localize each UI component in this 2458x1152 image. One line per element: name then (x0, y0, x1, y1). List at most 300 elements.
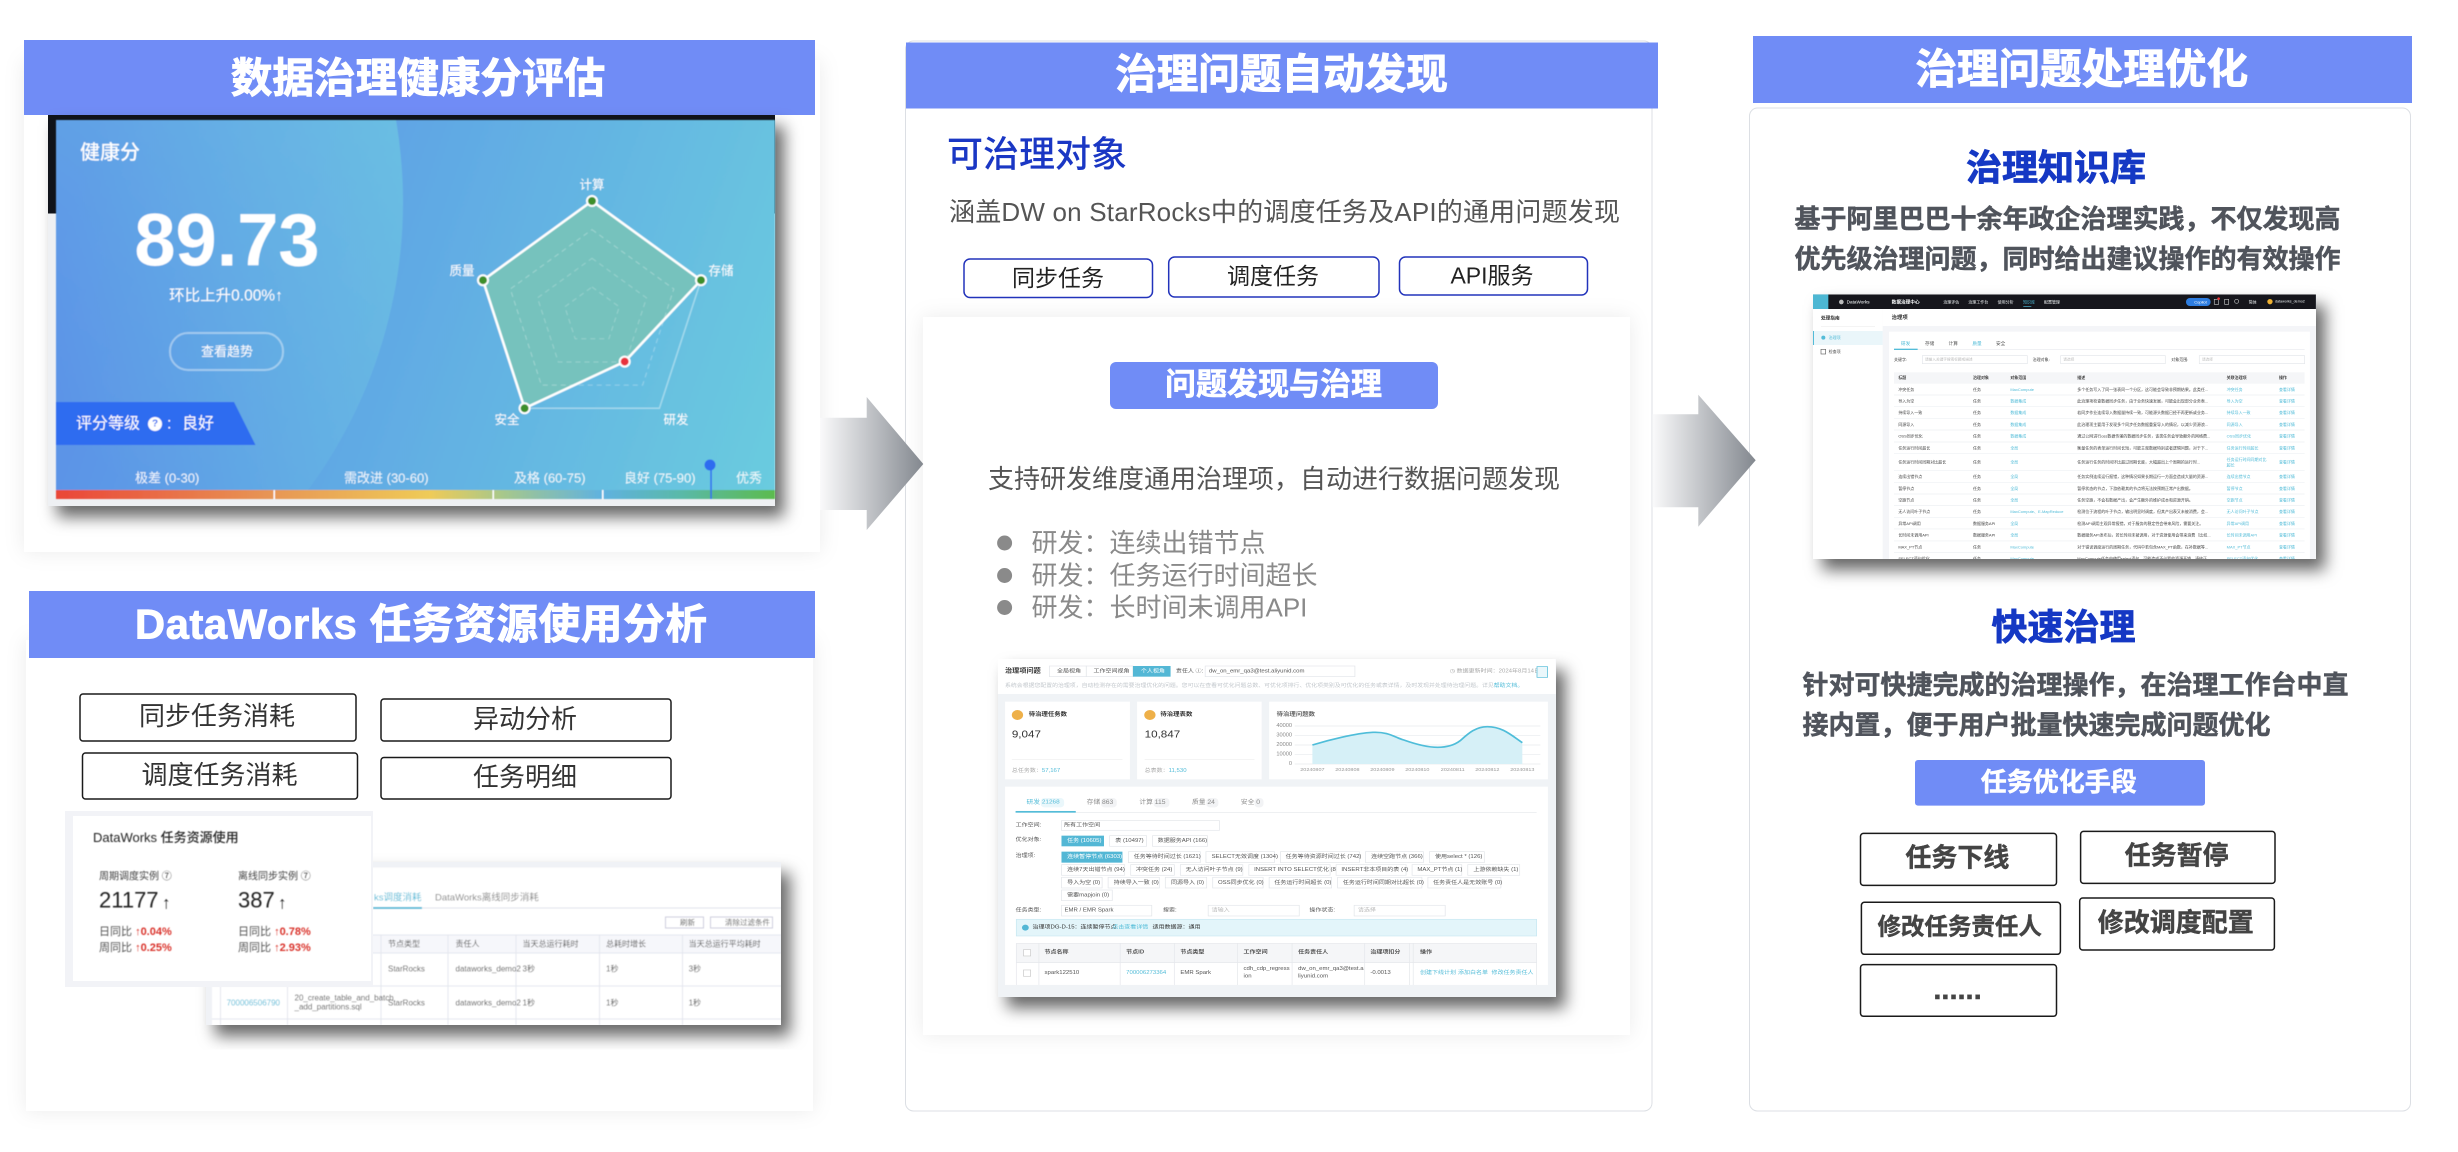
grade scale labels: 优秀 (736, 470, 762, 486)
issue list card (1005, 787, 1548, 985)
description: governable objects: 涵盖DW on StarRocks中的调度任务及API的通用问题发现 (949, 197, 1620, 227)
screenshot: consumption table: 1秒 (606, 998, 618, 1008)
screenshot: knowledge base table: 任务 (1973, 444, 1981, 450)
screenshot: knowledge base table: 若同步作业连续导入数据量持续一致，可能源头数据已经不再更新或业务... (2077, 409, 2208, 415)
screenshot: knowledge base table: 查看详情 (2279, 485, 2295, 491)
issue list card: 任务运行时间同期对比超长 (0) (1343, 878, 1424, 886)
tag: scheduled task consumption (82, 753, 358, 799)
issue list card: MAX_PT节点 (1) (1417, 866, 1463, 873)
pill: task optimization methods: 任务优化手段 (1981, 767, 2137, 797)
screenshot: knowledge base table: MAX_PT节点 (2227, 543, 2251, 549)
screenshot: knowledge base table: 查看详情 (2279, 386, 2295, 392)
screenshot: governance issue console: 全局视角 (1057, 667, 1081, 674)
screenshot: knowledge base table: 空跑节点 (1898, 496, 1914, 502)
stat card: tasks: 待治理任务数 (1029, 710, 1067, 718)
screenshot: knowledge base table: 任务 (1973, 432, 1981, 438)
screenshot: consumption table: 1秒 (606, 964, 618, 974)
button: more: ...... (1933, 974, 1982, 1006)
grade tag: 良好 (182, 414, 214, 432)
area chart: pending issues: 20000 (1276, 742, 1292, 748)
screenshot: knowledge base table: 数据集成 (2010, 397, 2026, 403)
screenshot: knowledge base table: 请选择 (2063, 357, 2075, 362)
bullet list: 研发：连续出错节点 (1032, 528, 1266, 558)
issue list card: 治理项: (1016, 852, 1036, 859)
screenshot: knowledge base table: MaxCompute、E-MapReduce (2010, 509, 2064, 514)
area chart: pending issues: 20240808 (1335, 767, 1360, 773)
screenshot: knowledge base table: 长时间未调用API (2227, 531, 2257, 537)
area chart: pending issues: 20240812 (1475, 767, 1500, 773)
stat card: tasks: 9,047 (1012, 729, 1041, 740)
metric: scheduled instances: 日同比 ↑0.04% (99, 925, 172, 938)
screenshot: knowledge base table: 任务 (1973, 386, 1981, 392)
screenshot: consumption table (206, 862, 781, 1026)
stat card: tables: 10,847 (1145, 729, 1180, 740)
issue list card: 持续导入一致 (0) (1114, 878, 1159, 886)
area chart: pending issues: 20240809 (1370, 767, 1395, 773)
issue list card: 连续暂停节点 (6303) (1067, 853, 1122, 860)
screenshot: knowledge base table: 数据集成 (2010, 409, 2026, 415)
screenshot: knowledge base table: 任务 (1973, 397, 1981, 403)
tag: API service: API服务 (1450, 262, 1534, 288)
tag: sync task: 同步任务 (1012, 265, 1104, 291)
issue list card: INSERT INTO SELECT优化 (8) (1254, 866, 1338, 873)
screenshot: knowledge base table: 空跑节点 (2227, 496, 2243, 502)
issue list card: 点击查看详情 (1112, 923, 1149, 930)
metric: scheduled instances: ↑ (162, 894, 170, 912)
screenshot: knowledge base table: 治理评估 (1943, 298, 1959, 304)
screenshot: governance issue console: 系统会根据您配置的治理项，自动检测存在的需要治理优化的问题。您可以在查看可优化问题总数、可优化项排行、优化项类别及可优化的任务或表详情，及时发现并处理待治理问题。详见帮助文档。 (1005, 681, 1523, 689)
screenshot: knowledge base table: 任务 (1973, 473, 1981, 479)
issue list card: 请输入 (1212, 906, 1230, 913)
screenshot: consumption table: 当天总运行耗时 (522, 938, 578, 948)
screenshot: knowledge base table: Copilot (2194, 299, 2208, 304)
screenshot: knowledge base table: 任务 (1973, 543, 1981, 549)
issue list card: 搜索: (1163, 906, 1177, 913)
screenshot: knowledge base table: 数据集成 (2010, 421, 2026, 427)
grade scale labels (135, 470, 762, 486)
issue list card: 任务等待时间过长 (1621) (1134, 853, 1201, 860)
screenshot: consumption table: 当天总运行平均耗时 (689, 938, 761, 948)
screenshot: knowledge base table: 查看详情 (2279, 458, 2295, 464)
button: take task offline (1860, 833, 2056, 885)
description: quick governance: 针对可快捷完成的治理操作，在治理工作台中直 (1802, 670, 2349, 700)
heading: issue handling optimization (1753, 36, 2412, 103)
screenshot: knowledge base table: 计算 (1949, 340, 1958, 347)
tag: task detail: 任务明细 (473, 762, 577, 792)
screenshot: consumption table: _add_partitions.sql (294, 1002, 362, 1012)
grade tag (56, 402, 256, 445)
screenshot: knowledge base table: 任务实例连续运行报错，这种情况如果长期运行一方面会造成大量的资源... (2077, 473, 2208, 479)
metric: scheduled instances: 周同比 ↑0.25% (99, 941, 172, 954)
screenshot: knowledge base table: 同源导入 (2227, 421, 2243, 427)
issue list card: 修改任务责任人 (1491, 968, 1534, 976)
score value: 89.73 (134, 198, 320, 282)
screenshot: knowledge base table: 查看详情 (2279, 496, 2295, 502)
issue list card: 上游依赖缺失 (1) (1473, 866, 1519, 873)
label: health score: 健康分 (80, 141, 140, 164)
issue list card: dw_on_emr_qa3@test.a (1298, 966, 1365, 972)
screenshot: consumption table: 3秒 (522, 964, 535, 974)
screenshot: knowledge base table: 描述 (2077, 374, 2085, 380)
screenshot: consumption table: StarRocks (388, 998, 425, 1008)
tag: sync task consumption (80, 694, 356, 741)
issue list card: 连续空跑节点 (366) (1371, 853, 1423, 860)
screenshot: consumption table: StarRocks (388, 964, 425, 974)
screenshot: knowledge base table: 全局 (2010, 444, 2018, 450)
area chart: pending issues (1269, 702, 1548, 779)
tag: task detail (381, 758, 671, 799)
metric: scheduled instances (99, 870, 172, 954)
screenshot: governance issue console (998, 659, 1556, 997)
description: knowledge base: 优先级治理问题，同时给出建议操作的有效操作 (1794, 244, 2341, 274)
screenshot: knowledge base table: 研发 (1901, 340, 1911, 347)
metric: offline sync instances (238, 870, 311, 954)
issue list card: cdh_cdp_regress (1244, 966, 1290, 972)
panel: issue handling optimization (1750, 36, 2412, 1111)
issue list card: 添加白名单 (1458, 968, 1488, 976)
screenshot: knowledge base table: OSS同步优化 (1898, 432, 1923, 438)
screenshot: knowledge base table: 冲突任务 (1898, 386, 1914, 392)
screenshot: knowledge base table: 此治理项主要用于发现多个同步任务数据重复导入的情况，以减少资源浪... (2077, 421, 2208, 427)
button: change schedule config: 修改调度配置 (2098, 908, 2254, 938)
screenshot: governance issue console: 工作空间视角 (1093, 667, 1129, 674)
screenshot: knowledge base table: 配置管理 (2044, 298, 2060, 304)
radar chart: 安全 (494, 412, 520, 427)
metric: scheduled instances: 周期调度实例 ⑦ (99, 870, 172, 882)
issue list card: 安全 0 (1241, 797, 1261, 806)
screenshot: knowledge base table: 查看详情 (2279, 520, 2295, 526)
screenshot: governance issue console: 个人视角 (1141, 667, 1165, 674)
screenshot: knowledge base table: 暂停节点 (2227, 485, 2243, 491)
screenshot: governance issue console: ◷ 数据更新时间：2024年8月14日 (1450, 667, 1540, 674)
screenshot: knowledge base table: 关联治理项 (2227, 374, 2247, 380)
button: view trend (170, 333, 283, 370)
screenshot: consumption table: dataworks_demo2 (456, 964, 521, 974)
grade tag: 评分等级 (76, 414, 140, 432)
button: change schedule config (2080, 898, 2274, 950)
issue list card: 表 (10497) (1115, 836, 1144, 844)
screenshot: governance issue console: dw_on_emr_qa3@test.aliyunid.com (1209, 669, 1305, 674)
screenshot: knowledge base table: 全局 (2010, 496, 2018, 502)
issue list card: -0.0013 (1370, 970, 1391, 976)
issue list card: 所有工作空间 (1064, 821, 1100, 828)
screenshot: knowledge base table: 数据服务API (1973, 520, 1995, 526)
screenshot: governance issue console: 治理项问题 (1005, 666, 1041, 675)
area chart: pending issues: 20240810 (1405, 767, 1430, 773)
issue list card: 需要mapjoin (0) (1067, 892, 1109, 898)
screenshot: knowledge base table: OSS同步优化 (2227, 432, 2251, 438)
metric: offline sync instances: 离线同步实例 ⑦ (238, 870, 311, 882)
screenshot: knowledge base table: 使用分析 (1998, 298, 2014, 304)
issue list card: 任务责任人 (1298, 948, 1328, 955)
screenshot: consumption table: 节点类型 (388, 938, 420, 948)
area chart: pending issues: 10000 (1276, 752, 1292, 757)
stat card: tables: 总表数：11,530 (1145, 766, 1187, 774)
screenshot: knowledge base table: 数据集成 (2010, 432, 2026, 438)
issue list card: 无人访问叶子节点 (9) (1186, 866, 1243, 873)
description: knowledge base (1794, 204, 2341, 274)
radar chart: 研发 (663, 412, 689, 427)
tag: anomaly analysis (381, 699, 671, 741)
panel: automatic issue discovery (906, 41, 1658, 1111)
issue list card: 适用数据源：通用 (1153, 923, 1201, 930)
screenshot: knowledge base table: 对象范围 (2010, 374, 2026, 380)
screenshot: knowledge base table: MaxCompute (2010, 556, 2035, 561)
screenshot: knowledge base table: 标题 (1898, 374, 1906, 380)
issue list card: SELECT无效调度 (1304) (1212, 853, 1278, 860)
card: resource usage: DataWorks 任务资源使用 (93, 830, 239, 845)
grade scale labels: 极差 (0-30) (135, 470, 199, 486)
screenshot: knowledge base table (1813, 294, 2316, 562)
heading: health score: 数据治理健康分评估 (231, 54, 605, 102)
screenshot: governance issue console: 责任人 ⓘ: (1176, 667, 1204, 674)
screenshot: knowledge base table: 查看详情 (2279, 543, 2295, 549)
issue list card: 请选择 (1358, 906, 1376, 913)
screenshot: consumption table: 清除过滤条件 (725, 917, 770, 927)
screenshot: knowledge base table: SELECT语句优化 (1898, 555, 1930, 561)
area chart: pending issues: 待治理问题数 (1277, 710, 1315, 718)
screenshot: knowledge base table: 全局 (2010, 531, 2018, 537)
screenshot: knowledge base table: 对象范围: (2171, 356, 2188, 362)
button: pause task: 任务暂停 (2125, 840, 2229, 870)
issue list card: 操作 (1420, 948, 1432, 955)
button: view trend: 查看趋势 (201, 344, 253, 359)
pill heading: 问题发现与治理 (1165, 367, 1382, 402)
issue list card: 任务运行时间超长 (0) (1274, 878, 1332, 886)
bullet list (997, 528, 1318, 622)
screenshot: knowledge base table: 查看详情 (2279, 397, 2295, 403)
panel: health score (22, 40, 822, 554)
screenshot: consumption table: 20_create_table_and_batch (294, 994, 394, 1002)
issue list card: ion (1244, 974, 1252, 979)
issue list card: OSS同步优化 (0) (1218, 878, 1264, 886)
pill: task optimization methods (1915, 760, 2205, 806)
screenshot: knowledge base table: 查看详情 (2279, 555, 2295, 561)
screenshot: consumption table: 刷新 (680, 917, 695, 927)
screenshot: knowledge base table: 查看详情 (2279, 432, 2295, 438)
screenshot: knowledge base table: 此治理项检查数据同步任务，由于业务快速发展，可能会出现部分业务表... (2077, 397, 2208, 403)
screenshot: knowledge base table: SELECT语句优化 (2227, 555, 2258, 561)
radar chart: 质量 (449, 264, 475, 278)
issue list card: 质量 24 (1192, 797, 1215, 806)
screenshot: health dashboard (45, 114, 796, 529)
screenshot: knowledge base table: 任务 (1973, 508, 1981, 514)
radar chart: 存储 (708, 263, 734, 278)
screenshot: knowledge base table: 持续导入一致 (1898, 409, 1922, 415)
heading: automatic issue discovery: 治理问题自动发现 (1115, 50, 1448, 98)
issue list card: 优化对象: (1016, 835, 1042, 843)
tag: scheduled task: 调度任务 (1227, 263, 1319, 289)
screenshot: knowledge base table: 数据服务API (1973, 531, 1995, 537)
screenshot: knowledge base table: 衡量任务的表单运行时间长短，可能主观数据特别或者逻辑问题，对于下... (2077, 444, 2208, 450)
screenshot: knowledge base table: 任务运行任务的时间环比超过同期长度，大幅超出上个周期的运行时... (2077, 458, 2200, 464)
screenshot: knowledge base table: 无人访问叶子节点 (1898, 508, 1930, 514)
screenshot: knowledge base table: 超长 (2227, 461, 2235, 467)
screenshot: knowledge base table: 治理项 (1892, 313, 1908, 321)
screenshot: knowledge base table: 查看详情 (2279, 508, 2295, 514)
stat card: tasks: 总任务数：57,167 (1012, 766, 1060, 774)
grade scale labels: 需改进 (30-60) (344, 470, 429, 486)
screenshot: knowledge base table: 任务 (1973, 421, 1981, 427)
screenshot: knowledge base table: MAX_PT节点 (1898, 543, 1922, 549)
button: take task offline: 任务下线 (1905, 842, 2009, 872)
screenshot: knowledge base table: 任务 (1973, 458, 1981, 464)
pill heading (1110, 362, 1438, 409)
heading: health score (24, 40, 815, 115)
issue list card: 任务责任人是无效账号 (0) (1433, 878, 1502, 886)
button: change task owner (1861, 902, 2060, 954)
screenshot: knowledge base table: 异常API调用 (2227, 520, 2249, 526)
area chart: pending issues: 20240807 (1300, 767, 1325, 773)
screenshot: consumption table: 700006506790 (227, 998, 281, 1008)
heading: task resource analysis: DataWorks 任务资源使用分析 (135, 600, 707, 648)
issue list card: 导入为空 (0) (1067, 878, 1100, 886)
area chart: pending issues: 30000 (1276, 733, 1292, 738)
screenshot: knowledge base table: 任务 (1973, 409, 1981, 415)
radar chart: 计算 (579, 177, 605, 192)
stat card: tables: 待治理表数 (1160, 710, 1192, 718)
screenshot: knowledge base table: 对于错误调度运行的周期任务，代码中若包含MAX_PT函数，在补数据等... (2077, 543, 2208, 549)
screenshot: knowledge base table: 全局 (2010, 458, 2018, 464)
screenshot: consumption table: dataworks_demo2 (456, 998, 521, 1008)
screenshot: knowledge base table: 治理工作台 (1968, 298, 1988, 304)
screenshot: consumption table: 1秒 (689, 998, 701, 1008)
metric: offline sync instances: 日同比 ↑0.78% (238, 925, 311, 938)
issue list card: EMR / EMR Spark (1064, 908, 1114, 913)
screenshot: knowledge base table: 长时间未调用API (1898, 531, 1929, 537)
screenshot: knowledge base table: 同源导入 (1898, 421, 1914, 427)
screenshot: consumption table: 总耗时增长 (606, 938, 646, 948)
screenshot: knowledge base table: MaxCompute任务中使用select语句，可能造成不必要的资源开销，请修正... (2077, 555, 2210, 561)
heading: quick governance: 快速治理 (1991, 606, 2136, 648)
screenshot: knowledge base table: 暂停状态的节点，下游依赖其的节点将无法按预期正常产出数据。 (2077, 485, 2193, 491)
screenshot: knowledge base table: 检测位于流程的叶子节点，输出明显时调度，但其产出表又未被消费，会... (2077, 508, 2208, 514)
tag: scheduled task (1169, 257, 1379, 297)
screenshot: knowledge base table: 存储 (1925, 340, 1935, 347)
issue list card: 冲突任务 (24) (1136, 866, 1172, 873)
issue list card: 治理项扣分 (1370, 948, 1401, 955)
screenshot: knowledge base table: 安全 (1996, 340, 2006, 347)
card: issue discovery and governance (923, 317, 1630, 1035)
screenshot: knowledge base table: 连续出错节点 (2227, 473, 2251, 479)
screenshot: knowledge base table: 查看详情 (2279, 444, 2295, 450)
screenshot: knowledge base table: DataWorks (1847, 299, 1870, 304)
stat card: tables (1137, 702, 1262, 779)
issue list card: 计算 115 (1139, 797, 1166, 806)
screenshot: knowledge base table: 质量 (1972, 340, 1982, 347)
issue list card: 工作空间 (1244, 948, 1268, 955)
issue list card: 任务 (10605) (1067, 836, 1102, 844)
issue list card: 节点类型 (1180, 948, 1205, 955)
screenshot: knowledge base table: 任务 (1973, 496, 1981, 502)
tag: sync task consumption: 同步任务消耗 (139, 701, 295, 731)
screenshot: knowledge base table: 任务运行时间同期对比超长 (1898, 458, 1946, 464)
screenshot: knowledge base table: 任务运行时间超长 (2227, 444, 2259, 450)
screenshot: knowledge base table: 无人访问叶子节点 (2227, 508, 2259, 514)
area chart: pending issues: 20240811 (1441, 767, 1465, 773)
screenshot: knowledge base table: 检查项 (1829, 348, 1841, 354)
screenshot: knowledge base table: 关键字: (1894, 356, 1907, 362)
issue list card: 操作状态: (1309, 906, 1336, 913)
screenshot: knowledge base table: 简体 (2249, 298, 2257, 304)
arrow: second to third panel (1652, 395, 1756, 527)
description: quick governance (1802, 670, 2349, 740)
screenshot: knowledge base table: 连续出错节点 (1898, 473, 1922, 479)
screenshot: knowledge base table: 导入为空 (2227, 397, 2243, 403)
screenshot: consumption table: ks调度消耗 (374, 892, 422, 904)
issue list card: 数据服务API (166) (1158, 836, 1207, 844)
screenshot: consumption table: 3秒 (689, 964, 701, 974)
score marker (704, 460, 716, 499)
issue list card: 节点ID (1126, 948, 1144, 955)
screenshot: knowledge base table: 请选择 (2202, 357, 2213, 362)
description: discovery: 支持研发维度通用治理项，自动进行数据问题发现 (988, 464, 1560, 494)
metric: offline sync instances: 周同比 ↑2.93% (238, 941, 311, 954)
heading: issue handling optimization: 治理问题处理优化 (1915, 46, 2248, 92)
area chart: pending issues: 40000 (1276, 723, 1292, 729)
issue list card: 治理项DG-D-15：连续暂停节点 (1033, 923, 1117, 930)
screenshot: knowledge base table: 持续导入一致 (2227, 409, 2251, 415)
description: quick governance: 接内置，便于用户批量快速完成问题优化 (1802, 710, 2271, 740)
button: change task owner: 修改任务责任人 (1877, 913, 2042, 939)
screenshot: knowledge base table: 通过公网进行oss数据传输的数据同步任务，该类任务会导致额外的网络费... (2077, 432, 2210, 438)
screenshot: knowledge base table: 全局 (2010, 473, 2018, 479)
tag: scheduled task consumption: 调度任务消耗 (141, 760, 298, 790)
issue list card: 任务等待资源时间过长 (742) (1286, 853, 1362, 860)
screenshot: knowledge base table: 任务运行时间同期对比 (2227, 456, 2266, 462)
screenshot: consumption table: 1秒 (522, 998, 535, 1008)
grade tag: : (167, 416, 171, 432)
screenshot: knowledge base table: 操作 (2279, 374, 2287, 380)
grade colour bar (56, 490, 775, 499)
metric: offline sync instances: ↑ (278, 894, 286, 912)
screenshot: knowledge base table: 任务 (1973, 555, 1981, 561)
screenshot: knowledge base table: MaxCompute (2010, 387, 2035, 392)
bullet list: 研发：任务运行时间超长 (1032, 560, 1318, 590)
screenshot: knowledge base table: 治理对象: (2033, 356, 2050, 362)
screenshot: knowledge base table: MaxCompute (2010, 544, 2035, 549)
issue list card: 存储 863 (1087, 797, 1114, 806)
screenshot: knowledge base table: dataworks_demo2 (2275, 299, 2305, 303)
issue list card: 创建下线计划 (1420, 968, 1456, 976)
screenshot: knowledge base table: 导入为空 (1898, 397, 1914, 403)
heading: task resource analysis (29, 591, 815, 658)
metric: scheduled instances: 21177 (99, 888, 159, 912)
issue list card: 使用select * (126) (1435, 853, 1483, 860)
screenshot: knowledge base table: 查看详情 (2279, 531, 2295, 537)
screenshot: knowledge base table: 查看详情 (2279, 409, 2295, 415)
tag: API service (1400, 257, 1588, 295)
grade tag: ? (152, 418, 158, 430)
screenshot: knowledge base table: 查看详情 (2279, 421, 2295, 427)
screenshot: knowledge base table: 全局 (2010, 520, 2018, 526)
screenshot: knowledge base table: 全局 (2010, 485, 2018, 491)
issue list card: 研发 21268 (1026, 797, 1060, 806)
screenshot: knowledge base table: 冲突任务 (2227, 386, 2243, 392)
metric: offline sync instances: 387 (238, 888, 275, 912)
month-on-month change: 环比上升0.00%↑ (169, 286, 283, 304)
issue list card: 节点名称 (1045, 948, 1069, 955)
screenshot: knowledge base table: 查看详情 (2279, 473, 2295, 479)
issue list card: 工作空间: (1016, 821, 1042, 828)
grade scale labels: 及格 (60-75) (514, 470, 586, 486)
bullet list: 研发：长时间未调用API (1032, 592, 1307, 622)
screenshot: knowledge base table: 暂停节点 (1898, 485, 1914, 491)
screenshot: knowledge base table: 知识库 (2023, 298, 2035, 304)
screenshot: knowledge base table: 治理对象 (1973, 374, 1989, 380)
card: resource usage (65, 811, 373, 987)
stat card: tasks (1005, 702, 1130, 779)
